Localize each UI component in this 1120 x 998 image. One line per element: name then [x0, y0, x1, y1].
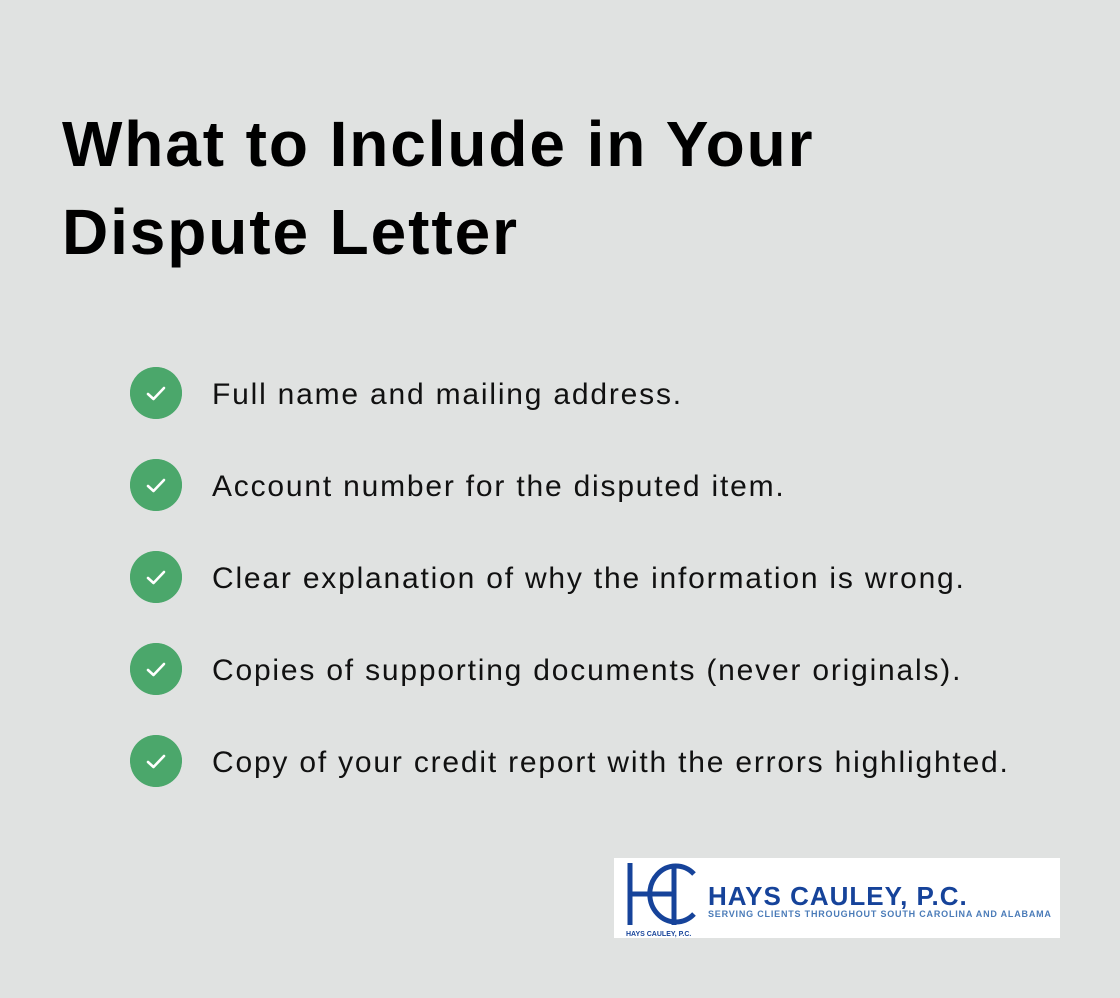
title: [62, 108, 814, 268]
item 5: Copy of your credit report with the errors highlighted.: [212, 746, 1010, 779]
checklist: [130, 367, 1010, 787]
item 1: [130, 367, 683, 419]
item 1: Full name and mailing address.: [212, 378, 683, 411]
logo: [614, 858, 1060, 938]
title: Dispute Letter: [62, 196, 519, 268]
logo: HAYS CAULEY, P.C.: [708, 881, 968, 911]
item 4: [130, 643, 962, 695]
item 4: Copies of supporting documents (never originals).: [212, 654, 962, 687]
title: What to Include in Your: [62, 108, 814, 180]
item 5: [130, 735, 1010, 787]
item 3: [130, 551, 966, 603]
logo: SERVING CLIENTS THROUGHOUT SOUTH CAROLINA AND ALABAMA: [708, 909, 1052, 919]
logo: HAYS CAULEY, P.C.: [626, 931, 691, 938]
icon: HC monogram: [630, 863, 694, 925]
item 3: Clear explanation of why the information is wrong.: [212, 562, 966, 595]
item 2: Account number for the disputed item.: [212, 470, 786, 503]
item 2: [130, 459, 786, 511]
